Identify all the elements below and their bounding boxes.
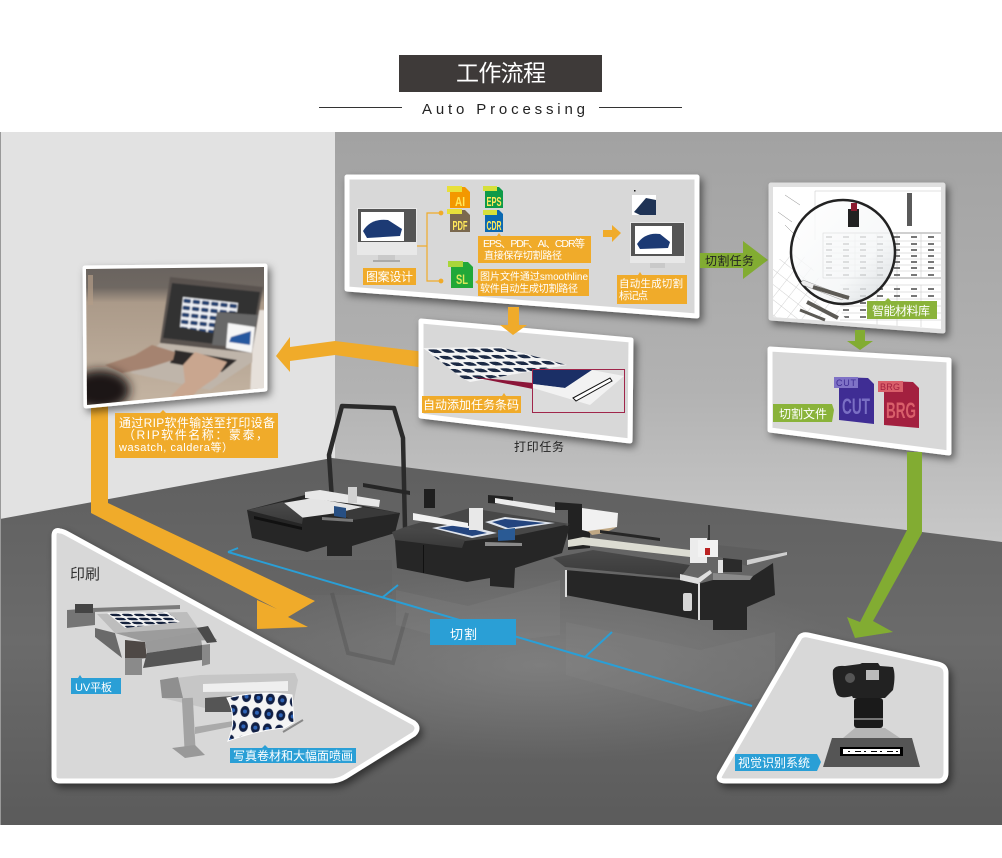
- icon: SL file: [448, 261, 473, 288]
- label: cutting: [430, 619, 516, 645]
- label: RIP software: [115, 410, 278, 458]
- machine 3: [553, 525, 787, 630]
- icon: BRG file: [878, 381, 919, 428]
- icon: SL file: SL: [456, 271, 468, 287]
- caption: print task: 打印任务: [514, 439, 564, 454]
- panel: laptop photo: [70, 262, 270, 412]
- panel: pattern design and cutting paths: [347, 177, 697, 316]
- title: 工作流程: [456, 60, 546, 86]
- icon: AI file: AI: [455, 194, 465, 209]
- subtitle: Auto Processing: Auto Processing: [422, 101, 585, 118]
- icon: camera target: [823, 738, 920, 767]
- label: pattern design: 图案设计: [366, 269, 413, 284]
- machine 2: [392, 495, 618, 588]
- icon: design monitor: [357, 208, 417, 262]
- label: cut task: 切割任务: [705, 253, 754, 268]
- large format printer: [160, 673, 303, 758]
- label: smart material library: [867, 298, 937, 319]
- UV flatbed printer: [67, 604, 217, 675]
- panel: cut files: [770, 349, 949, 453]
- label: direct path formats: 直接保存切割路径: [484, 249, 562, 262]
- label: UV flatbed: UV平板: [75, 680, 112, 694]
- label: auto cut marks: 自动生成切割: [619, 277, 683, 290]
- icon: PDF file: PDF: [452, 218, 468, 233]
- icon: cropped artwork preview: [632, 190, 656, 215]
- label: RIP software: wasatch, caldera等）: [118, 440, 233, 454]
- label: cut file: 切割文件: [779, 406, 827, 421]
- icon: BRG file: BRG: [880, 382, 900, 392]
- label: smoothline path generation: [475, 269, 589, 296]
- icon: CUT file: [834, 377, 874, 424]
- label: direct path formats: EPS、PDF、AI、CDR等: [483, 237, 586, 250]
- small arrow: [603, 225, 621, 242]
- panel: smart material library: [770, 185, 945, 331]
- label: cutting: 切割: [450, 627, 477, 642]
- label: auto cut marks: 标记点: [619, 290, 648, 302]
- barcode inset: [532, 370, 624, 412]
- icon: EPS file: EPS: [486, 194, 502, 209]
- magnifier: [791, 200, 895, 320]
- blue cutting line: [228, 548, 752, 706]
- icon: CUT file: CUT: [836, 378, 856, 388]
- arrow: cut file to vision: [847, 452, 922, 638]
- label: UV flatbed: [71, 675, 121, 694]
- label: auto cut marks: [617, 272, 687, 304]
- material data table: [778, 191, 942, 327]
- arrow: laptop to printing: [91, 400, 315, 629]
- label: auto add barcode: 自动添加任务条码: [423, 397, 519, 412]
- panel: vision recognition: [719, 635, 946, 781]
- machine 1 with camera arch: [247, 406, 435, 556]
- icon: EPS file: [483, 186, 503, 209]
- label: smoothline path generation: 图片文件通过smoothline: [480, 270, 588, 283]
- label: roll media and wide format: 写真卷材和大幅面喷画: [233, 748, 353, 763]
- icon: AI file: [447, 186, 470, 209]
- printed sheet: [423, 347, 567, 382]
- icon: BRG file: BRG: [886, 398, 916, 423]
- label: RIP software: （RIP软件名称：蒙泰，: [123, 427, 268, 442]
- icon: camera: [833, 663, 900, 738]
- icon: CDR file: [483, 210, 503, 233]
- icon: CUT file: CUT: [842, 394, 870, 419]
- arrow: cut task: [700, 241, 768, 279]
- label: cut file: [773, 404, 834, 422]
- icon: PDF file: [447, 209, 470, 233]
- label: smart material library: 智能材料库: [872, 303, 930, 318]
- heading: printing: 印刷: [70, 566, 100, 583]
- connector to barcode inset: [473, 377, 533, 389]
- label: direct path formats: [478, 233, 591, 263]
- arrow: material to cut file: [847, 330, 873, 350]
- icon: output monitor: [630, 222, 685, 268]
- label: vision recognition system: 视觉识别系统: [738, 755, 810, 770]
- label: auto add barcode: [422, 393, 521, 413]
- reflection of machines on floor: [250, 560, 775, 712]
- title: [399, 55, 602, 92]
- arrow: barcode panel to laptop: [276, 337, 425, 372]
- label: smoothline path generation: 软件自动生成切割路径: [480, 282, 578, 295]
- label: RIP software: 通过RIP软件输送至打印设备: [119, 415, 275, 430]
- arrow: design to barcode: [500, 307, 527, 335]
- panel: auto barcode: [421, 321, 631, 441]
- bracket connector: [417, 211, 443, 283]
- panel: printing: [54, 531, 417, 781]
- label: vision recognition system: [735, 754, 821, 771]
- icon: CDR file: CDR: [486, 218, 502, 233]
